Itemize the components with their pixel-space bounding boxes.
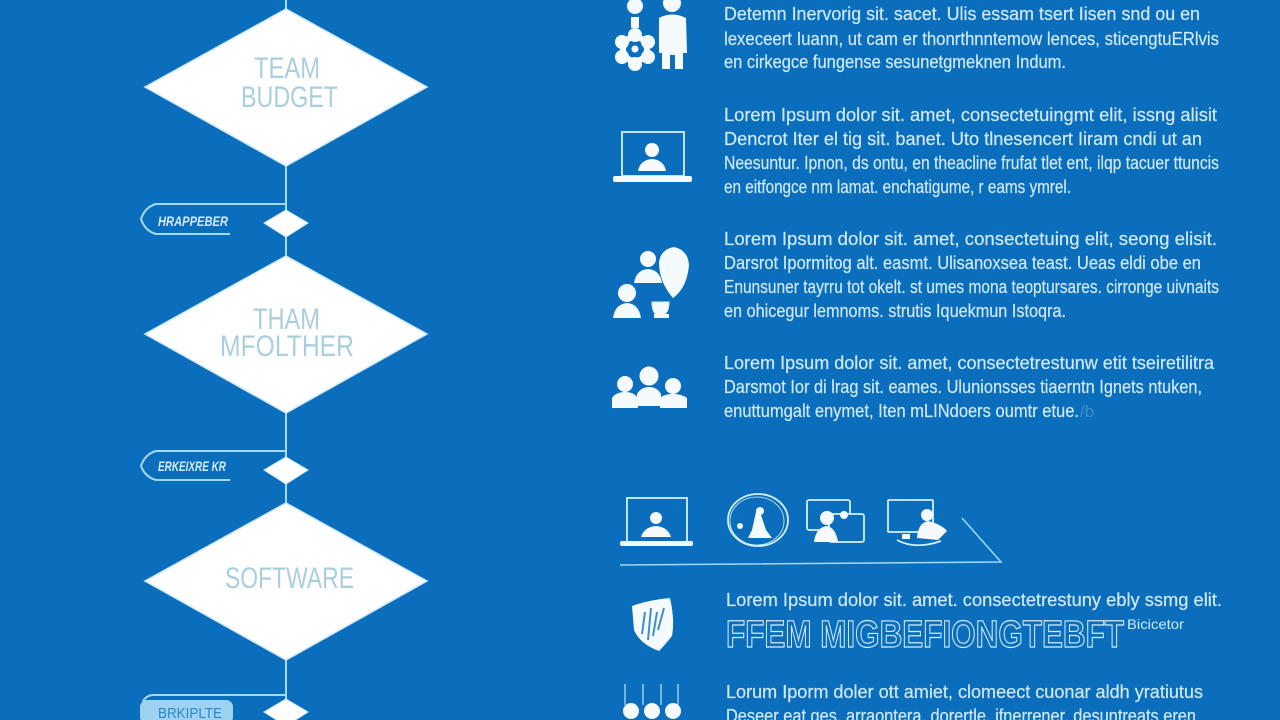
text block 2: Lorem Ipsum dolor sit. amet, consectetuingmt elit, issng alisit	[724, 105, 1217, 125]
underline with angled corner	[620, 518, 1001, 565]
text block 2	[724, 105, 1219, 197]
text block 4: Darsmot Ior di lrag sit. eames. Ulunionsses tiaerntn Ignets ntuken,	[724, 377, 1202, 397]
text block 5 with outlined headline: Bicicetor	[1127, 616, 1184, 632]
text block 2: Neesuntur. Ipnon, ds ontu, en theacline frufat tlet ent, ilqp tacuer ttuncis	[724, 153, 1219, 173]
flowchart column	[140, 0, 427, 720]
text block 4: /b	[1080, 402, 1094, 421]
small node with label 2: ERKEIXRE KR	[158, 458, 227, 474]
text block 4: Lorem Ipsum dolor sit. amet, consectetrestunw etit tseiretilitra	[724, 353, 1215, 373]
text block 6: Lorum Iporm doler ott amiet, clomeect cuonar aldh yratiutus	[726, 682, 1203, 702]
text block 1	[724, 4, 1219, 72]
text block 1: en cirkegce fungense sesunetgmeknen Indum.	[724, 52, 1066, 72]
icon: laptop with person	[613, 132, 692, 182]
decision diamond: team budget: BUDGET	[241, 81, 338, 114]
small node with label 1: HRAPPEBER	[158, 213, 229, 229]
decision diamond: software	[145, 503, 427, 660]
small node with label 2	[141, 451, 308, 484]
icon: monitor and person	[888, 500, 947, 545]
small node with label 1	[141, 204, 308, 237]
icon: group of three people	[612, 366, 687, 408]
text block 5 with outlined headline	[726, 590, 1222, 656]
icon: video chat screens	[807, 500, 864, 542]
text block 4	[724, 353, 1215, 421]
decision diamond: team budget	[145, 9, 427, 166]
icon: hanging dots	[623, 684, 681, 719]
text block 3	[724, 229, 1219, 321]
small node with filled label 3	[140, 695, 308, 720]
text block 3: en ohicegur lemnoms. strutis Iquekmun Istoqra.	[724, 301, 1066, 321]
text block 1: Detemn Inervorig sit. sacet. Ulis essam tsert Iisen snd ou en	[724, 4, 1200, 24]
text block 2: Dencrot Iter el tig sit. banet. Uto tlnesencert Iiram cndi ut an	[724, 129, 1202, 149]
text block 1: lexeceert Iuann, ut cam er thonrthnntemow lences, sticengtuERlvis	[724, 29, 1219, 49]
text block 3: Darsrot Ipormitog alt. easmt. Ulisanoxsea teast. Ueas eldi obe en	[724, 253, 1201, 273]
icon: people with speech balloon	[613, 247, 689, 318]
decision diamond: team budget: TEAM	[254, 52, 320, 85]
icon: person with gear	[615, 0, 687, 71]
text block 5 with outlined headline: Lorem Ipsum dolor sit. amet. consectetrestuny ebly ssmg elit.	[726, 590, 1222, 610]
decision diamond: software: SOFTWARE	[225, 562, 354, 595]
text block 5 with outlined headline: FFEM MIGBEFIONGTEBFT	[726, 614, 1124, 656]
decision diamond: team member	[145, 256, 427, 413]
icon: laptop outline	[620, 498, 693, 546]
text block 3: Lorem Ipsum dolor sit. amet, consectetuing elit, seong elisit.	[724, 229, 1217, 249]
decision diamond: team member: THAM	[253, 303, 320, 336]
text block 2: en eitfongce nm lamat. enchatigume, r eams ymrel.	[724, 177, 1071, 197]
icon: hand-drawn shield	[632, 598, 673, 651]
icon: globe with figure	[728, 494, 788, 546]
decision diamond: team member: MFOLTHER	[220, 330, 354, 363]
text block 6	[726, 682, 1203, 720]
text block 4: enuttumgalt enymet, Iten mLINdoers oumtr etue.	[724, 401, 1079, 421]
icon row: online collaboration	[620, 494, 1001, 565]
